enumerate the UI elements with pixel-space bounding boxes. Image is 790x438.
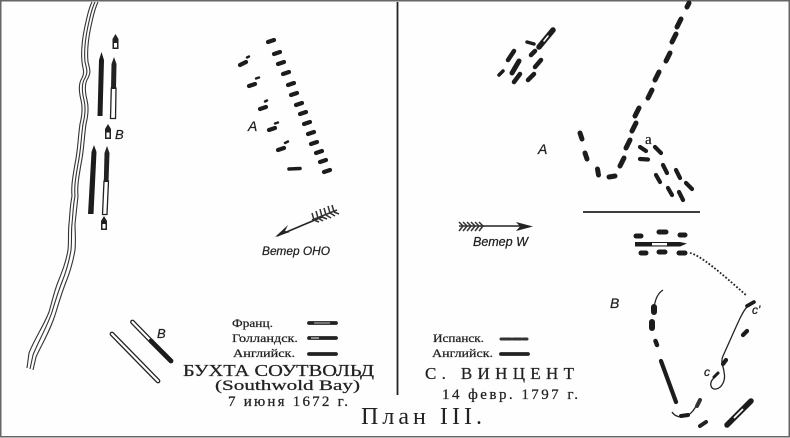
heading: Southwold Bay: БУХТА СОУТВОЛЬД [183, 361, 374, 380]
heading: Southwold Bay: (Southwold Bay) [215, 378, 360, 394]
label c: с [704, 365, 710, 379]
legend row: English: Английск. [432, 346, 493, 360]
ship column: black and white bar north [110, 57, 116, 118]
wind arrow: ONO [275, 205, 339, 237]
ship: centre small [105, 124, 111, 139]
legend row: Spanish: Испанск. [433, 331, 484, 345]
white and black bar [132, 322, 171, 361]
white bar [112, 334, 158, 381]
fleet: St Vincent, loop C to C' [704, 302, 761, 389]
fleet: St Vincent, top group [499, 30, 553, 82]
heading: Southwold Bay [183, 361, 374, 410]
fleet: St Vincent, Spanish main line [580, 3, 689, 177]
label B right: В [610, 295, 619, 311]
label B: В [115, 127, 124, 142]
coastline [27, 2, 98, 370]
title: План III. [361, 404, 482, 430]
legend: Southwold Bay [232, 316, 336, 360]
label A left: А [247, 118, 257, 134]
heading: Southwold Bay: 7 июня 1672 г. [228, 394, 348, 410]
fleet: St Vincent, centre group [635, 232, 687, 253]
legend row: English: Английск. [233, 346, 295, 360]
fleet: Southwold Bay, line A [240, 40, 330, 172]
dotted track [690, 253, 747, 296]
fleet: St Vincent, English line B [652, 290, 751, 426]
ship column: black bar south [88, 145, 96, 214]
legend: St Vincent [432, 331, 528, 360]
ship: south small [101, 216, 107, 230]
wind arrow: W [459, 222, 533, 231]
wind label W: Ветер W [473, 235, 529, 249]
fleet: Southwold Bay, line B [88, 34, 124, 230]
label a: а [645, 132, 652, 148]
ship: north small [112, 34, 118, 49]
heading: St Vincent [425, 364, 578, 403]
fleet: St Vincent, group a [640, 147, 692, 200]
label c prime: с' [752, 303, 761, 317]
legend row: French: Франц. [232, 316, 273, 330]
legend row: Dutch: Голландск. [232, 331, 298, 345]
heading: St Vincent: С. ВИНЦЕНТ [425, 364, 575, 383]
fleet: St Vincent, horizontal line [583, 211, 700, 213]
ship column: black and white bar south [102, 146, 110, 214]
ship column: black bar north [98, 52, 104, 116]
label B lower: В [157, 326, 166, 341]
wind label ONO: Ветер ОНО [262, 244, 330, 258]
fleet: Southwold Bay, line B lower [112, 322, 171, 381]
heading: St Vincent: 14 февр. 1797 г. [442, 387, 578, 403]
vertical divider [396, 2, 398, 395]
label A right: А [537, 141, 547, 157]
